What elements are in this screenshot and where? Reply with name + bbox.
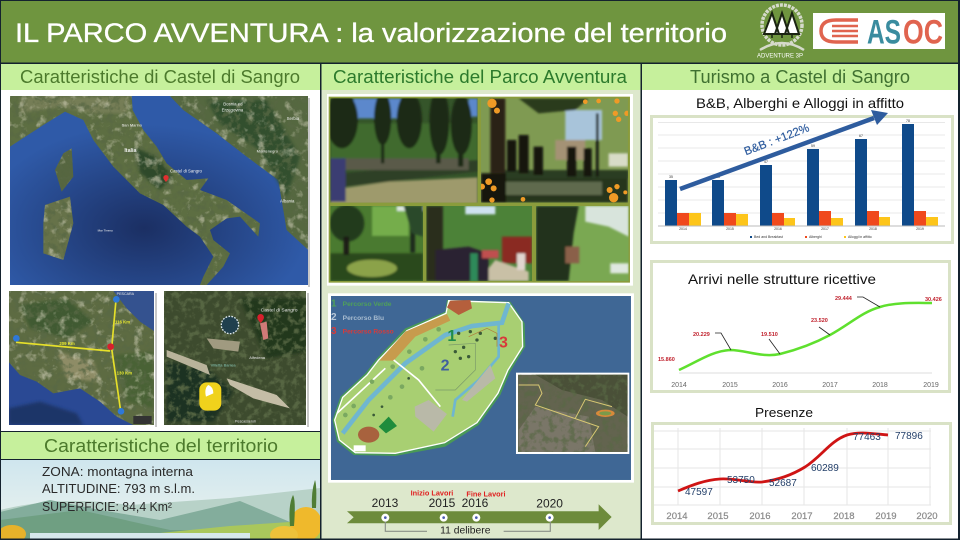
territory data text: SUPERFICIE: 84,4 Km² <box>42 499 173 514</box>
year axis: 2016 <box>772 382 788 389</box>
map: Italy satellite: Erzegovina <box>222 107 244 112</box>
map: Italy satellite: Albania <box>280 198 295 203</box>
connector to 11 delibere <box>385 521 550 531</box>
bar value and year labels: 2014 <box>679 227 687 231</box>
bars: Alloggi in affitto <box>689 213 938 226</box>
route legend: 2 <box>331 312 337 323</box>
bar value and year labels: 47 <box>764 160 768 164</box>
logo: ASOC <box>813 13 945 52</box>
bar value and year labels: 2016 <box>774 227 782 231</box>
map: Italy satellite: Montenegro <box>257 149 279 154</box>
data labels <box>685 431 923 498</box>
year axis <box>671 382 939 389</box>
route numbers on map: 1 <box>447 328 456 345</box>
map: Italy satellite: Serbia <box>287 116 300 121</box>
growth arrow <box>680 110 888 189</box>
photo: picnic under trees <box>330 98 478 203</box>
data labels: 47597 <box>685 487 713 498</box>
map: national park terrain <box>164 291 306 425</box>
map: national park terrain: Alfedena <box>249 355 266 360</box>
route numbers on map <box>441 328 508 375</box>
bar value and year labels: 67 <box>859 134 863 138</box>
chart legend: Bed and Breakfast <box>754 235 783 239</box>
bar value and year labels: 2017 <box>821 227 829 231</box>
year axis: 2019 <box>875 511 897 522</box>
bar value and year labels: 78 <box>906 119 910 123</box>
bar value and year labels: 35 <box>669 175 673 179</box>
subheader: territorio <box>0 432 320 459</box>
bar value and year labels: 35 <box>716 175 720 179</box>
milestone captions: Fine Lavori <box>466 489 506 498</box>
data labels: 52687 <box>769 478 797 489</box>
line: presenze <box>678 433 888 491</box>
year axis: 2017 <box>822 382 838 389</box>
subheader: Turismo <box>642 64 960 90</box>
map: Italy satellite: San Marino <box>122 123 143 128</box>
logo: ASOC: AS <box>867 14 901 52</box>
bar value and year labels: 59 <box>811 144 815 148</box>
panel: photo collage <box>326 88 633 286</box>
route legend: Percorso Blu <box>343 315 384 322</box>
route legend: 3 <box>331 326 337 337</box>
map: distances from cities: 116 Km <box>115 319 130 324</box>
map: Italy satellite: Mar Tirreno <box>98 228 113 232</box>
data labels: 53750 <box>727 475 755 486</box>
subheader: Castel di Sangro: Caratteristiche di Castel di Sangro <box>20 67 300 87</box>
timeline labels: 2015 <box>429 496 456 510</box>
map: national park terrain: Pescasseroli <box>235 419 256 423</box>
milestone captions: Inizio Lavori <box>411 489 453 498</box>
chart legend <box>750 235 872 239</box>
route legend: Percorso Rosso <box>343 328 394 335</box>
photo: climber in tree <box>536 206 629 281</box>
subheader: Parco Avventura: Caratteristiche del Parco Avventura <box>333 67 628 87</box>
year axis: 2018 <box>872 382 888 389</box>
timeline <box>347 489 612 537</box>
year axis <box>666 511 938 522</box>
data labels: 77896 <box>895 431 923 442</box>
year axis: 2020 <box>916 511 938 522</box>
chart: Arrivi nelle strutture ricettive <box>652 262 950 392</box>
inset satellite map <box>516 373 629 454</box>
chart title: Presenze <box>755 405 813 420</box>
route numbers on map: 2 <box>441 358 450 375</box>
photo: green clearing <box>330 205 424 281</box>
map: distances from cities <box>9 291 154 425</box>
map: distances from cities: 209 Km <box>59 341 75 346</box>
subheader: Turismo: Turismo a Castel di Sangro <box>690 67 910 87</box>
data labels: 77463 <box>853 432 881 443</box>
line: arrivi <box>679 303 932 370</box>
logo: ASOC: OC <box>903 14 943 52</box>
panel: park map <box>328 293 634 483</box>
year axis: 2014 <box>666 511 688 522</box>
data labels <box>658 296 942 363</box>
data labels: 29.444 <box>835 296 853 302</box>
subheader: Parco Avventura <box>321 64 641 90</box>
data labels: 23.520 <box>811 318 828 324</box>
map: distances from cities: PESCARA <box>117 292 135 296</box>
bars: Bed and Breakfast <box>665 124 914 226</box>
photo: children on bridge <box>479 98 630 203</box>
bar value and year labels: 2019 <box>916 227 924 231</box>
leader lines <box>715 297 880 354</box>
year axis: 2014 <box>671 382 687 389</box>
map frame shadow <box>307 293 309 427</box>
timeline labels <box>372 496 563 537</box>
territory data text: ALTITUDINE: 793 m s.l.m. <box>42 481 195 496</box>
territory data text <box>42 464 195 514</box>
data labels: 15.860 <box>658 357 675 363</box>
map frame shadow <box>308 98 310 287</box>
logo: Adventure 3P <box>757 5 804 60</box>
data labels: 30.426 <box>925 297 942 303</box>
timeline arrow <box>347 504 612 530</box>
map: national park terrain: Villetta Barrea <box>211 362 236 367</box>
island <box>333 300 525 456</box>
territory data text: ZONA: montagna interna <box>42 464 194 479</box>
chart title: B&B, Alberghi e Alloggi in affitto <box>696 95 904 111</box>
milestone markers <box>381 514 554 522</box>
panel: landscape with territory data <box>0 460 322 540</box>
map: national park terrain: Castel di Sangro <box>261 307 298 313</box>
year axis: 2017 <box>791 511 813 522</box>
timeline labels: 2016 <box>462 496 489 510</box>
header band <box>0 0 960 63</box>
map: Italy satellite: Bosnia ed <box>223 101 243 106</box>
year axis: 2015 <box>707 511 729 522</box>
panel: centre column background <box>321 90 641 540</box>
route legend: 1 <box>331 299 337 310</box>
route legend: Percorso Verde <box>343 301 392 308</box>
chart legend: Alloggi in affitto <box>848 235 872 239</box>
bar value and year labels: 2015 <box>726 227 734 231</box>
bar value and year labels <box>669 119 924 231</box>
chart title: Arrivi nelle strutture ricettive <box>688 271 876 287</box>
bars: Alberghi <box>677 211 926 226</box>
timeline labels: 2020 <box>536 497 563 511</box>
data labels: 60289 <box>811 463 839 474</box>
subheader: Castel di Sangro <box>0 64 320 90</box>
photo: crowd and hut <box>426 206 532 281</box>
map frame shadow <box>155 293 157 427</box>
map: Italy satellite: Italia <box>124 148 136 154</box>
route legend <box>331 299 394 337</box>
data labels: 19.510 <box>761 332 778 338</box>
map: Italy satellite: Castel di Sangro <box>170 169 203 174</box>
timeline labels: 11 delibere <box>440 526 491 537</box>
route numbers on map: 3 <box>499 334 508 351</box>
year axis: 2019 <box>923 382 939 389</box>
timeline labels: 2013 <box>372 496 399 510</box>
milestone captions <box>411 489 506 498</box>
growth label: B&B : +122% <box>743 122 811 158</box>
chart legend: Alberghi <box>809 235 822 239</box>
logo: Adventure 3P: ADVENTURE 3P <box>757 54 803 60</box>
data labels: 20.229 <box>693 332 710 338</box>
bar value and year labels: 2018 <box>869 227 877 231</box>
year axis: 2015 <box>722 382 738 389</box>
year axis: 2018 <box>833 511 855 522</box>
map: distances from cities: 130 Km <box>117 370 132 375</box>
map: Italy satellite <box>10 96 308 285</box>
chart: Presenze <box>652 405 950 524</box>
title: IL PARCO AVVENTURA : la valorizzazione del territorio <box>15 18 727 48</box>
chart: B&B, Alberghi e Alloggi <box>652 95 952 242</box>
subheader: territorio: Caratteristiche del territorio <box>44 436 278 456</box>
year axis: 2016 <box>749 511 771 522</box>
